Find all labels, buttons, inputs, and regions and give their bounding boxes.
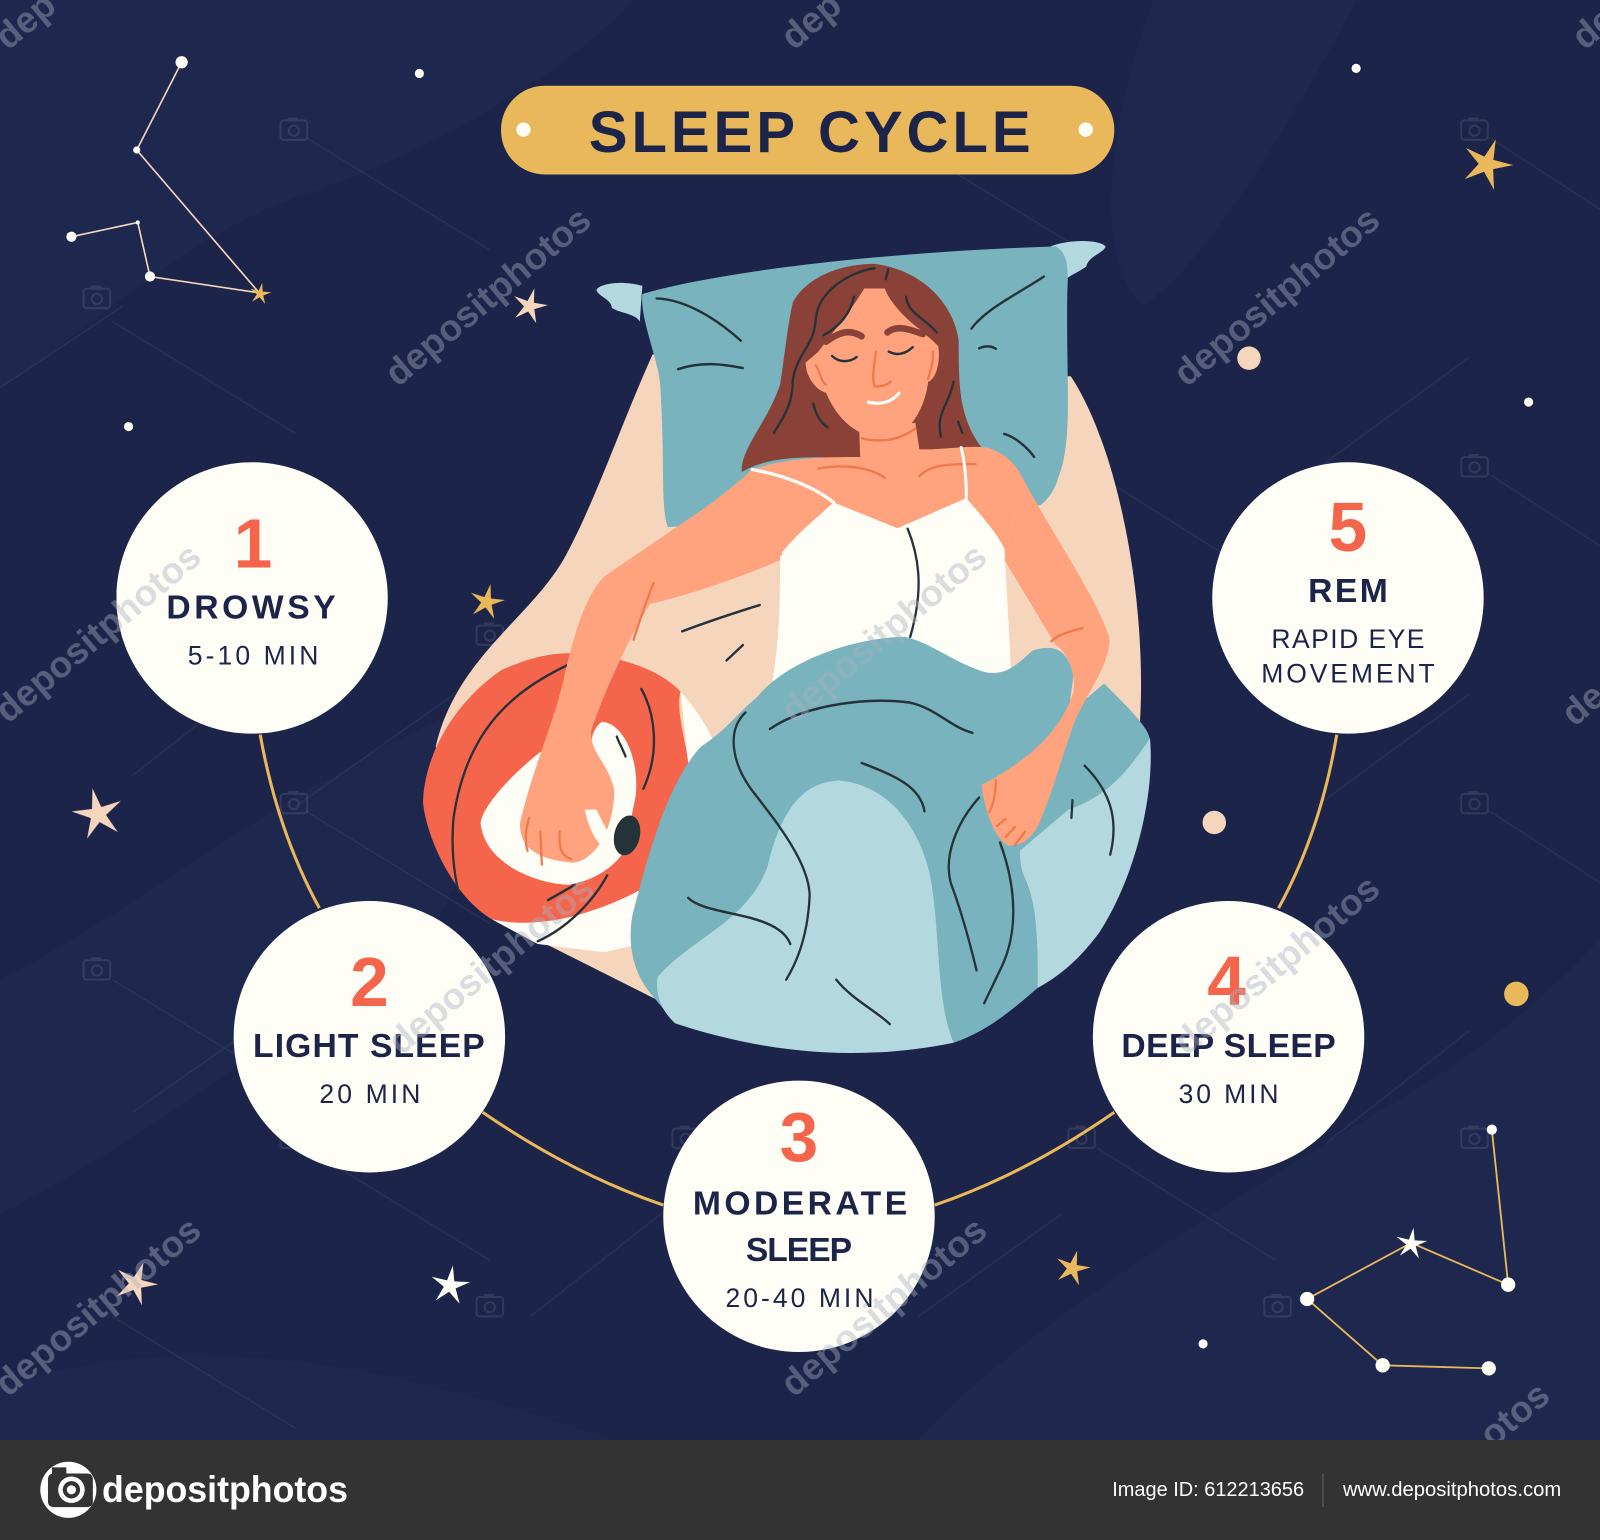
stage 4: deep sleep: DEEP SLEEP	[1121, 1028, 1336, 1065]
stage 5: REM: REM	[1308, 573, 1388, 610]
stage 3: moderate sleep: SLEEP	[746, 1232, 852, 1269]
footer logo icon	[40, 1462, 96, 1518]
watermark: depositphotos	[773, 535, 994, 731]
stage 1: drowsy	[116, 462, 388, 734]
watermark: depositphotos	[773, 1209, 994, 1404]
footer bar	[0, 1440, 1600, 1540]
stage 3: moderate sleep: 3	[780, 1098, 818, 1176]
stage 3: moderate sleep: MODERATE	[693, 1185, 907, 1222]
illustration: sleeping woman	[423, 241, 1151, 1053]
stuffed dog toy	[423, 653, 712, 952]
hair	[742, 264, 982, 472]
left arm	[520, 472, 783, 864]
stage 3: moderate sleep: 20-40 MIN	[726, 1283, 873, 1313]
face	[774, 268, 976, 478]
sheet creases	[682, 605, 760, 660]
pillow	[596, 241, 1106, 527]
stage 4: deep sleep: 30 MIN	[1179, 1079, 1279, 1109]
peach background blob	[436, 354, 1141, 999]
title: SLEEP CYCLE	[589, 100, 1031, 165]
website: www.depositphotos.com	[1342, 1479, 1561, 1501]
image id: Image ID: 612213656	[1112, 1479, 1304, 1501]
watermark: depositphotos	[1166, 198, 1387, 394]
stage 5: REM: RAPID EYE	[1271, 624, 1424, 654]
stage 3: moderate sleep	[663, 1081, 935, 1352]
cycle connector arcs	[260, 735, 1337, 1205]
right arm	[982, 478, 1109, 846]
constellation: bottom right	[1300, 1124, 1515, 1376]
stage 2: light sleep	[234, 901, 505, 1172]
torso skin	[604, 423, 1022, 604]
stage 1: drowsy: DROWSY	[166, 589, 336, 626]
stage 2: light sleep: 2	[350, 943, 389, 1021]
stage 4: deep sleep	[1093, 901, 1364, 1172]
blanket folds	[688, 701, 1114, 1024]
stage 4: deep sleep: 4	[1207, 942, 1246, 1020]
constellation: top left	[66, 56, 273, 305]
watermark: otos	[1472, 1374, 1557, 1455]
title banner	[501, 86, 1114, 174]
stage 2: light sleep: 20 MIN	[319, 1079, 420, 1109]
stage 5: REM: 5	[1329, 488, 1367, 566]
blanket	[631, 637, 1151, 1053]
stage 5: REM	[1212, 462, 1484, 734]
stage 1: drowsy: 5-10 MIN	[188, 640, 318, 670]
footer logo wordmark: depositphotos	[102, 1469, 348, 1510]
watermark: depositphotos	[1166, 867, 1387, 1062]
dress	[752, 448, 1011, 681]
watermark: depositphotos	[380, 867, 602, 1062]
stage 1: drowsy: 1	[234, 504, 272, 582]
stage 5: REM: MOVEMENT	[1261, 659, 1435, 689]
stage 2: light sleep: LIGHT SLEEP	[253, 1028, 485, 1065]
scattered stars and dots	[68, 64, 1533, 1348]
watermark: depositphotos	[377, 198, 599, 394]
